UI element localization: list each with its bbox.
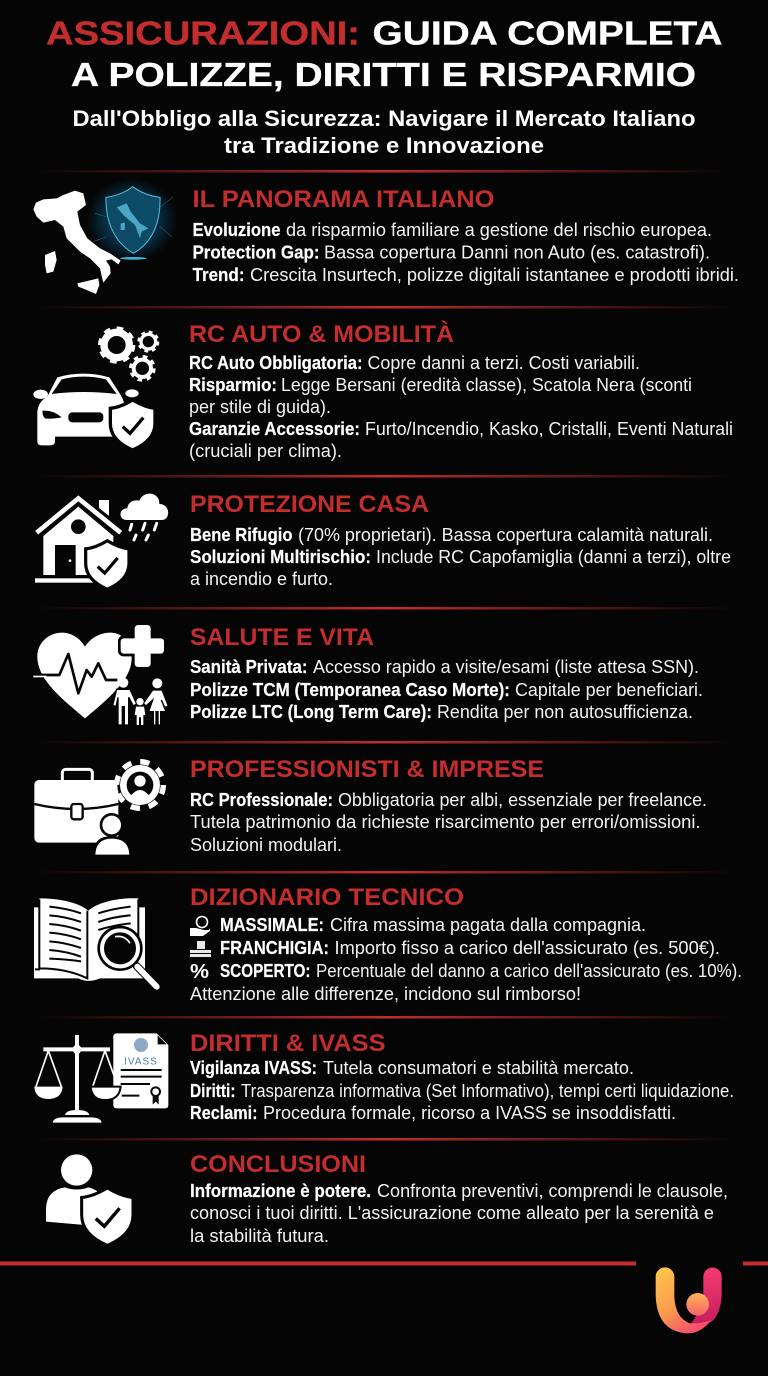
body text: MASSIMALE: [220,914,324,935]
icon: house, rain cloud and shield [35,494,168,589]
icon: open book and magnifier [34,898,157,987]
panel: diritti e ivass [34,1030,734,1123]
panel: protezione casa [35,491,731,589]
body text: (70% proprietari). Bassa copertura calamità naturali. [298,524,713,545]
panel: dizionario tecnico [34,884,742,1004]
body text: FRANCHIGIA: [220,937,329,958]
body text: Informazione è potere. [190,1180,371,1201]
body text [192,219,739,285]
body text: Crescita Insurtech, polizze digitali istantanee e prodotti ibridi. [250,264,739,285]
icon: hand with coin [190,916,210,936]
body text: Include RC Capofamiglia (danni a terzi), oltre [376,546,731,567]
body text: Obbligatoria per albi, essenziale per freelance. [338,789,707,810]
panel: professionisti e imprese [34,756,707,856]
body text [190,789,707,855]
body text: Diritti: [190,1080,236,1101]
body text: Accesso rapido a visite/esami (liste attesa SSN). [313,656,699,677]
title: GUIDA COMPLETA [372,16,722,52]
body text: a incendio e furto. [190,568,333,589]
icon: italy map and digital shield [33,178,177,294]
heading: CONCLUSIONI [190,1151,366,1178]
icon: scales and ivass document [34,1033,168,1123]
body text: Bassa copertura Danni non Auto (es. catastrofi). [324,242,710,262]
body text: Confronta preventivi, comprendi le clausole, [377,1180,728,1201]
panel: salute e vita [33,622,703,725]
subtitle: Dall'Obbligo alla Sicurezza: Navigare il Mercato Italiano [72,106,696,131]
title: ASSICURAZIONI: [46,16,360,52]
body text: Cifra massima pagata dalla compagnia. [330,914,646,935]
icon: briefcase, gear and person [34,762,163,856]
body text: Capitale per beneficiari. [515,679,703,700]
body text: Protection Gap: [192,242,320,262]
body text: Garanzie Accessorie: [189,418,360,439]
body text: la stabilità futura. [190,1225,329,1246]
subtitle: tra Tradizione e Innovazione [224,133,544,158]
body text: da risparmio familiare a gestione del rischio europea. [286,219,712,240]
body text: Legge Bersani (eredità classe), Scatola Nera (sconti [281,374,692,395]
icon: percent: % [190,961,209,983]
subtitle [72,106,696,158]
body text: Soluzioni Multirischio: [190,546,371,567]
body text: Furto/Incendio, Kasko, Cristalli, Eventi Naturali [365,418,733,439]
body text: Evoluzione [192,219,280,240]
body text: Soluzioni modulari. [190,834,342,855]
heading: PROTEZIONE CASA [190,491,429,518]
icon: banknotes stack [190,941,211,957]
title: A POLIZZE, DIRITTI E RISPARMIO [71,57,696,94]
body text: (cruciali per clima). [189,440,342,461]
body text: Risparmio: [189,374,277,395]
body text: RC Professionale: [190,789,333,810]
body text: Procedura formale, ricorso a IVASS se insoddisfatti. [263,1102,676,1123]
body text [190,914,742,1004]
heading: DIZIONARIO TECNICO [190,884,464,911]
body text: Attenzione alle differenze, incidono sul rimborso! [190,983,581,1004]
body text: Bene Rifugio [190,524,292,545]
body text: Reclami: [190,1102,258,1123]
heading: DIRITTI & IVASS [190,1030,386,1057]
body text: Importo fisso a carico dell'assicurato (es. 500€). [334,937,720,958]
heading: RC AUTO & MOBILITÀ [189,320,454,348]
body text: Trend: [192,264,244,285]
body text: Copre danni a terzi. Costi variabili. [368,352,640,373]
body text: Polizze TCM (Temporanea Caso Morte): [190,679,510,700]
body text: Vigilanza IVASS: [190,1057,317,1078]
body text: Polizze LTC (Long Term Care): [190,701,432,722]
logo [656,1267,722,1333]
panel: il panorama italiano [33,178,739,294]
body text: Sanità Privata: [190,656,308,677]
heading: IL PANORAMA ITALIANO [192,186,494,213]
body text: Tutela patrimonio da richieste risarcimento per errori/omissioni. [190,811,700,832]
icon: scales and ivass document: IVASS [124,1057,158,1068]
body text [190,656,703,722]
body text [190,1180,728,1246]
body text: SCOPERTO: [220,960,310,981]
heading: SALUTE E VITA [190,624,374,651]
panel: conclusioni [46,1151,728,1246]
title [46,16,722,94]
icon: heart, cross and family [33,622,168,725]
body text: Rendita per non autosufficienza. [437,701,693,722]
body text: RC Auto Obbligatoria: [189,352,362,373]
body text: Tutela consumatori e stabilità mercato. [323,1057,634,1078]
icon: person with shield [46,1154,133,1245]
body text [190,524,731,589]
body text: per stile di guida). [189,396,331,417]
panel: rc auto e mobilita [33,320,733,461]
heading: PROFESSIONISTI & IMPRESE [190,756,544,783]
body text [189,352,733,461]
body text: conosci i tuoi diritti. L'assicurazione come alleato per la serenità e [190,1202,714,1223]
icon: car, gears and shield [33,328,158,450]
body text [190,1057,734,1123]
